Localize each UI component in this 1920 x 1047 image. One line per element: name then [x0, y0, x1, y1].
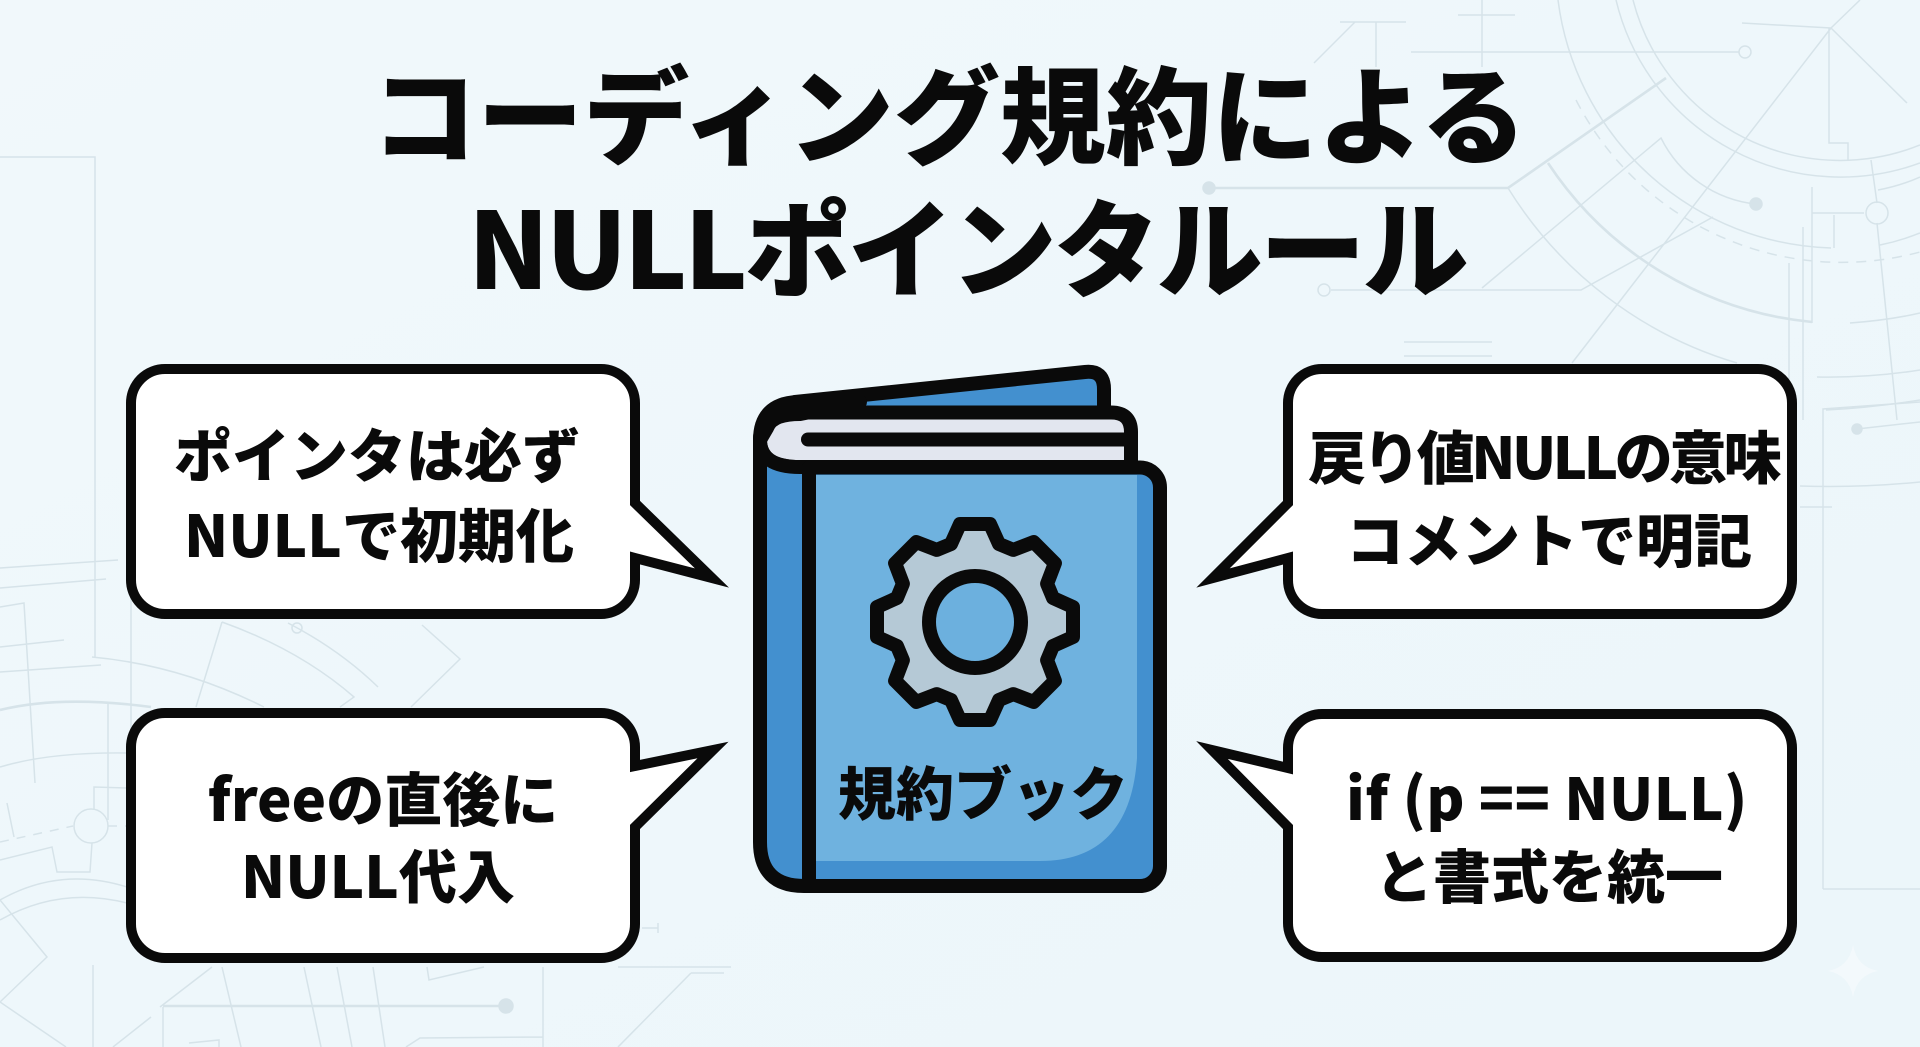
rule book icon — [760, 372, 1160, 886]
gear icon — [877, 524, 1073, 720]
title — [371, 33, 1527, 320]
cover highlight — [816, 475, 1137, 861]
callout: unify comparison format — [1212, 714, 1792, 957]
pages — [760, 412, 1131, 475]
back cover — [795, 372, 1104, 425]
callout: document NULL return meaning — [1213, 369, 1792, 614]
front cover — [809, 468, 1160, 886]
title: コーディング規約による — [371, 33, 1527, 187]
callout: unify comparison format: と書式を統一 — [1375, 831, 1723, 915]
title: NULLポインタルール — [468, 166, 1467, 320]
callout: assign NULL after free: freeの直後に — [208, 754, 558, 838]
book label: 規約ブック — [838, 748, 1128, 832]
callout: initialize with NULL: NULLで初期化 — [184, 490, 574, 574]
callout: assign NULL after free: NULL代入 — [241, 831, 515, 915]
top-left binding curve — [760, 402, 860, 440]
spine — [760, 440, 809, 886]
callout: unify comparison format: if (p == NULL) — [1346, 753, 1748, 837]
callout: document NULL return meaning: コメントで明記 — [1346, 495, 1752, 579]
page line — [808, 432, 1124, 446]
callout: initialize with NULL: ポインタは必ず — [174, 410, 580, 494]
callout: assign NULL after free — [131, 713, 713, 958]
callout: document NULL return meaning: 戻り値NULLの意味 — [1308, 412, 1782, 496]
watermark sparkle — [1828, 945, 1878, 997]
callout: initialize with NULL — [131, 369, 712, 614]
